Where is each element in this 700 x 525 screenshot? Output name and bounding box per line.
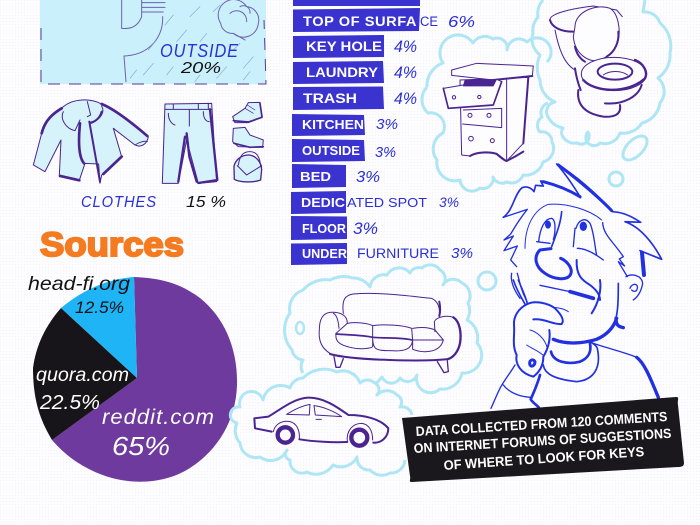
bar: top of surface: 6% <box>448 14 475 31</box>
bar: dedicated spot <box>291 191 459 214</box>
bar: dedicated spot: 3% <box>439 194 459 210</box>
label: quora.com: quora.com <box>36 365 129 386</box>
bar: top of surface: CE <box>420 14 438 29</box>
callout: data note: DATA COLLECTED FROM 120 COMMENTS <box>415 409 668 439</box>
bar: laundry: 4% <box>394 63 417 82</box>
head and hair <box>503 164 662 300</box>
value: 20%: 20% <box>180 60 221 77</box>
bar: floor <box>291 216 378 240</box>
bar: kitchen: KITCHEN <box>302 117 364 132</box>
bar: key hole: 4% <box>394 37 417 56</box>
label: clothes 15% <box>81 194 226 211</box>
icon: shoes and bag <box>233 102 263 182</box>
bar: under furniture: UNDER <box>302 246 348 261</box>
label: quora.com <box>36 365 129 414</box>
icon: jacket <box>33 100 148 183</box>
bar: dedicated spot: ATED SPOT <box>347 195 427 210</box>
bar: outside: 3% <box>375 144 396 161</box>
bar: kitchen: 3% <box>376 116 398 133</box>
label: reddit.com: reddit.com <box>102 406 215 429</box>
bar: laundry: LAUNDRY <box>306 65 378 80</box>
bar: trash: 4% <box>394 89 417 108</box>
bar: kitchen <box>292 114 398 136</box>
bar: trash: TRASH <box>303 91 357 106</box>
bar: under furniture: FURNITURE <box>357 246 439 261</box>
label: reddit.com <box>102 406 215 461</box>
thought bubble: small <box>609 172 623 186</box>
bar: key hole: KEY HOLE <box>306 39 382 54</box>
slice: quora.com <box>33 308 137 440</box>
label: head-fi.org: 12.5% <box>75 298 124 317</box>
label: head-fi.org <box>28 274 130 317</box>
pie chart: sources <box>28 274 237 482</box>
bar: floor: 3% <box>353 219 378 238</box>
hand, neck and shoulders <box>491 280 658 408</box>
bar: bed <box>292 164 380 188</box>
thought cloud: sofa <box>285 265 482 393</box>
bar: bed: BED <box>300 169 331 184</box>
icon: toilet <box>550 6 647 117</box>
bar: under furniture: 3% <box>451 245 473 262</box>
icon: trousers <box>162 103 217 183</box>
icon: dresser <box>443 63 533 161</box>
callout: data note <box>402 397 684 482</box>
bar: laundry <box>293 61 417 84</box>
callout: data note: OF WHERE TO LOOK FOR KEYS <box>443 444 645 473</box>
bar: dedicated spot: DEDIC <box>301 195 346 210</box>
slice: reddit.com <box>52 277 237 482</box>
bar: trash <box>293 86 417 110</box>
bar: top of surface: TOP OF SURFA <box>303 14 417 29</box>
bar: key hole <box>293 35 417 58</box>
icon: sofa <box>319 293 461 373</box>
bar: outside: OUTSIDE <box>302 143 360 158</box>
label: clothes 15%: 15 % <box>186 194 226 211</box>
panel: outside 20% <box>40 0 266 84</box>
bar: bed: 3% <box>356 169 380 186</box>
thought bubble: large <box>619 132 651 164</box>
thought curl: sofa <box>296 322 304 334</box>
bar: top of surface <box>293 8 475 32</box>
illustration: thinking person <box>491 164 662 408</box>
label: reddit.com: 65% <box>112 431 170 461</box>
label: outside: OUTSIDE <box>160 41 239 61</box>
thought cloud: car <box>230 369 412 475</box>
heading: sources: Sources <box>40 226 184 264</box>
slice: head-fi.org <box>61 277 137 378</box>
bar chart: where to look for keys <box>291 0 475 265</box>
icon: car <box>254 398 388 446</box>
bar: outside <box>292 139 396 162</box>
bar: under furniture <box>291 243 473 265</box>
bar: floor: FLOOR <box>302 221 347 236</box>
thought bubble: sofa side <box>478 272 496 290</box>
label: clothes 15%: CLOTHES <box>81 194 157 211</box>
thought cloud: toilet <box>532 0 671 146</box>
label: head-fi.org: head-fi.org <box>28 274 130 295</box>
thought cloud: dresser <box>422 35 554 191</box>
callout: data note: ON INTERNET FORUMS OF SUGGESTIONS <box>413 426 672 456</box>
label: quora.com: 22.5% <box>39 392 100 414</box>
